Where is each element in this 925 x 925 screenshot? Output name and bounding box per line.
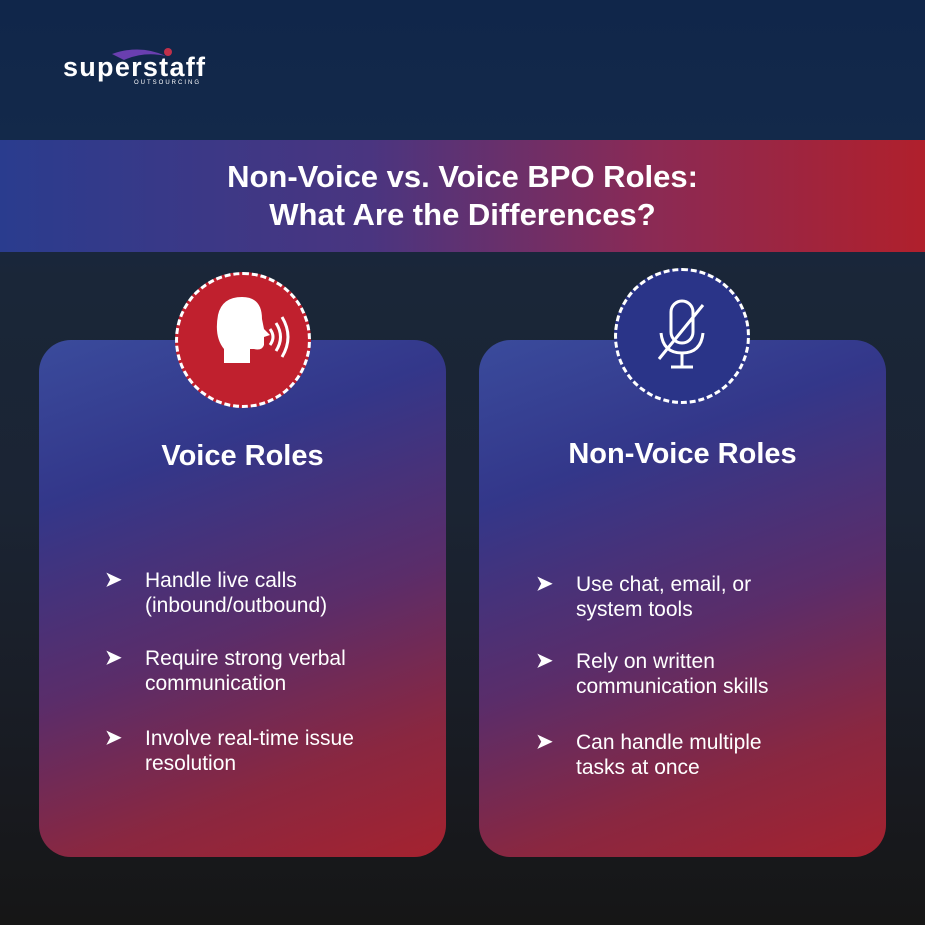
title banner: What Are the Differences? [269, 197, 656, 232]
bullet list: non-voice: system tools [576, 598, 693, 621]
logo: OUTSOURCING [134, 80, 201, 86]
icon: speaking head [175, 272, 311, 408]
bullet list: voice: Require strong verbal [145, 647, 346, 670]
title banner: Non-Voice vs. Voice BPO Roles: [227, 159, 698, 194]
panel: non-voice roles: ➤ [536, 573, 553, 595]
bullet list: voice: resolution [145, 752, 236, 775]
panel: non-voice roles: ➤ [536, 650, 553, 672]
bullet list: voice: communication [145, 672, 286, 695]
title banner [0, 140, 925, 252]
bullet list: voice [105, 569, 354, 775]
bullet list: non-voice [536, 573, 769, 779]
bullet list: voice: (inbound/outbound) [145, 594, 327, 617]
panel: voice roles [39, 340, 446, 857]
heading: non-voice roles: Non-Voice Roles [568, 438, 797, 470]
bullet list: non-voice: tasks at once [576, 756, 700, 779]
bullet list: voice: Involve real-time issue [145, 727, 354, 750]
panel: non-voice roles [479, 340, 886, 857]
panel: non-voice roles: ➤ [536, 731, 553, 753]
bullet list: non-voice: Rely on written [576, 650, 715, 673]
panel: voice roles: ➤ [105, 647, 122, 669]
bullet list: non-voice: Can handle multiple [576, 731, 762, 754]
logo: superstaff [63, 52, 206, 82]
panel: voice roles: ➤ [105, 569, 122, 591]
bullet list: non-voice: Use chat, email, or [576, 573, 751, 596]
bullet list: voice: Handle live calls [145, 569, 297, 592]
panel: voice roles: ➤ [105, 727, 122, 749]
bullet list: non-voice: communication skills [576, 675, 769, 698]
icon: muted microphone [614, 268, 750, 404]
heading: voice roles: Voice Roles [161, 440, 324, 472]
